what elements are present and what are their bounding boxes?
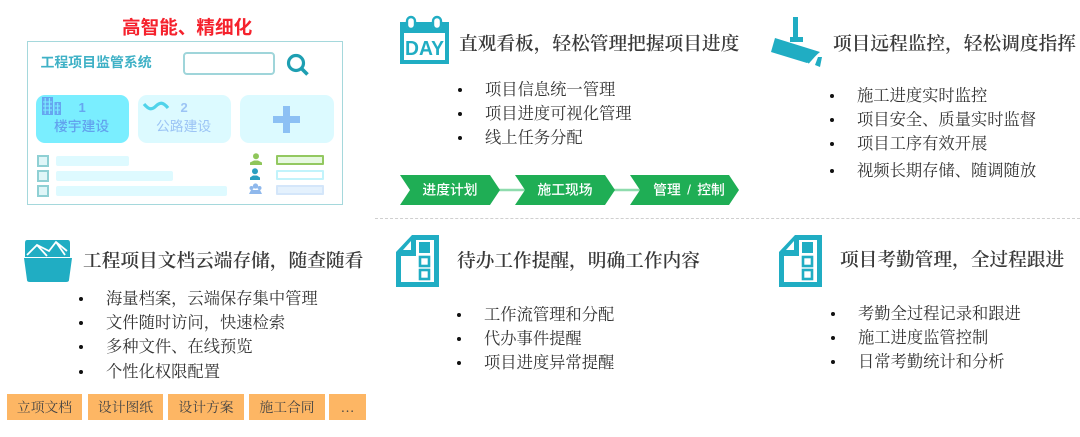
- step: management: 管理 / 控制: [653, 182, 725, 198]
- bullet item: 日常考勤统计和分析: [858, 352, 1005, 371]
- bullet item: 项目安全、质量实时监督: [857, 110, 1036, 129]
- card number: 1: [78, 100, 86, 114]
- checkbox: [36, 184, 48, 196]
- checkbox: [36, 170, 48, 182]
- bullet item: 施工进度实时监控: [857, 86, 987, 105]
- icon: calendar day: DAY: [405, 38, 445, 60]
- status tag cyan: [276, 170, 324, 180]
- card: add new: [240, 94, 334, 142]
- icon: user group: [249, 183, 262, 194]
- icon: surveillance camera: [771, 17, 822, 67]
- list bar: [56, 156, 128, 166]
- bullet item: 施工进度监管控制: [858, 328, 988, 347]
- tag: design drawings: [88, 394, 163, 420]
- bullet item: 工作流管理和分配: [484, 305, 614, 324]
- step: site: [515, 175, 615, 205]
- heading: attendance: 项目考勤管理，全过程跟进: [840, 250, 1064, 271]
- icon: calendar day: [400, 16, 449, 64]
- card: building construction: [36, 94, 128, 142]
- step: schedule: [400, 175, 500, 205]
- icon: user green: [250, 153, 262, 165]
- tag: design drawings: 设计图纸: [98, 400, 153, 415]
- tag: project documents: 立项文档: [17, 400, 72, 415]
- bullet item: 项目信息统一管理: [485, 80, 615, 99]
- search input: [182, 52, 274, 74]
- bullet item: 个性化权限配置: [106, 362, 220, 381]
- tag: construction contracts: [249, 394, 325, 420]
- bullet item: 代办事件提醒: [484, 329, 582, 348]
- icon: folder: [24, 240, 72, 282]
- status tag blue: [276, 184, 324, 194]
- tag: construction contracts: 施工合同: [259, 400, 315, 415]
- bullet item: 海量档案，云端保存集中管理: [106, 289, 318, 308]
- list bar: [56, 186, 226, 196]
- bullet item: 项目进度可视化管理: [485, 104, 632, 123]
- bullet item: 项目工序有效开展: [857, 134, 987, 153]
- bullet item: 项目进度异常提醒: [484, 353, 614, 372]
- tag: design plans: 设计方案: [178, 400, 234, 415]
- dashboard title: 工程项目监管系统: [40, 54, 152, 70]
- icon: magnifier: [286, 54, 309, 76]
- list bar: [56, 170, 172, 180]
- icon: road wave: [142, 102, 170, 110]
- tag: project documents: [7, 394, 82, 420]
- tag: more: …: [341, 400, 354, 415]
- heading: kanban: 直观看板，轻松管理把握项目进度: [459, 34, 739, 55]
- heading: to-do reminders: 待办工作提醒，明确工作内容: [457, 251, 700, 272]
- checkbox: [36, 154, 48, 166]
- row: second list item: [37, 170, 173, 182]
- row: third list item: [37, 185, 227, 197]
- bullet item: 多种文件、在线预览: [106, 337, 253, 356]
- bullet list: document storage: [79, 289, 318, 381]
- card label: 公路建设: [156, 118, 211, 134]
- status tag green: [276, 154, 324, 164]
- heading: monitoring: 项目远程监控，轻松调度指挥: [833, 34, 1076, 54]
- bullet item: 考勤全过程记录和跟进: [858, 304, 1021, 323]
- heading: intelligent and refined: 高智能、精细化: [122, 17, 252, 38]
- icon: plus: [273, 106, 300, 133]
- process flow arrows: [400, 175, 739, 205]
- icon: user teal: [250, 168, 260, 180]
- step: schedule: 进度计划: [422, 182, 478, 198]
- heading: document storage: 工程项目文档云端存储，随查随看: [83, 251, 363, 272]
- bullet list: kanban: [458, 80, 632, 147]
- bullet item: 文件随时访问，快速检索: [106, 313, 285, 332]
- bullet list: to-do reminders: [457, 305, 614, 372]
- bullet list: monitoring: [830, 86, 1036, 180]
- step: management: [630, 175, 739, 205]
- bullet item: 视频长期存储、随调随放: [857, 161, 1036, 180]
- panel: dashboard mockup: [27, 41, 343, 205]
- icon: buildings: [42, 97, 61, 115]
- tag: design plans: [168, 394, 244, 420]
- tag: more: [329, 394, 366, 420]
- step: site: 施工现场: [537, 182, 593, 198]
- icon: attendance document: [779, 235, 822, 287]
- bullet item: 线上任务分配: [485, 128, 583, 147]
- icon: task document: [396, 235, 439, 287]
- card number: 2: [180, 100, 188, 114]
- bullet list: attendance: [831, 304, 1021, 371]
- row: first list item: [37, 155, 129, 167]
- card: road construction: [138, 94, 230, 142]
- card label: 楼宇建设: [54, 118, 109, 134]
